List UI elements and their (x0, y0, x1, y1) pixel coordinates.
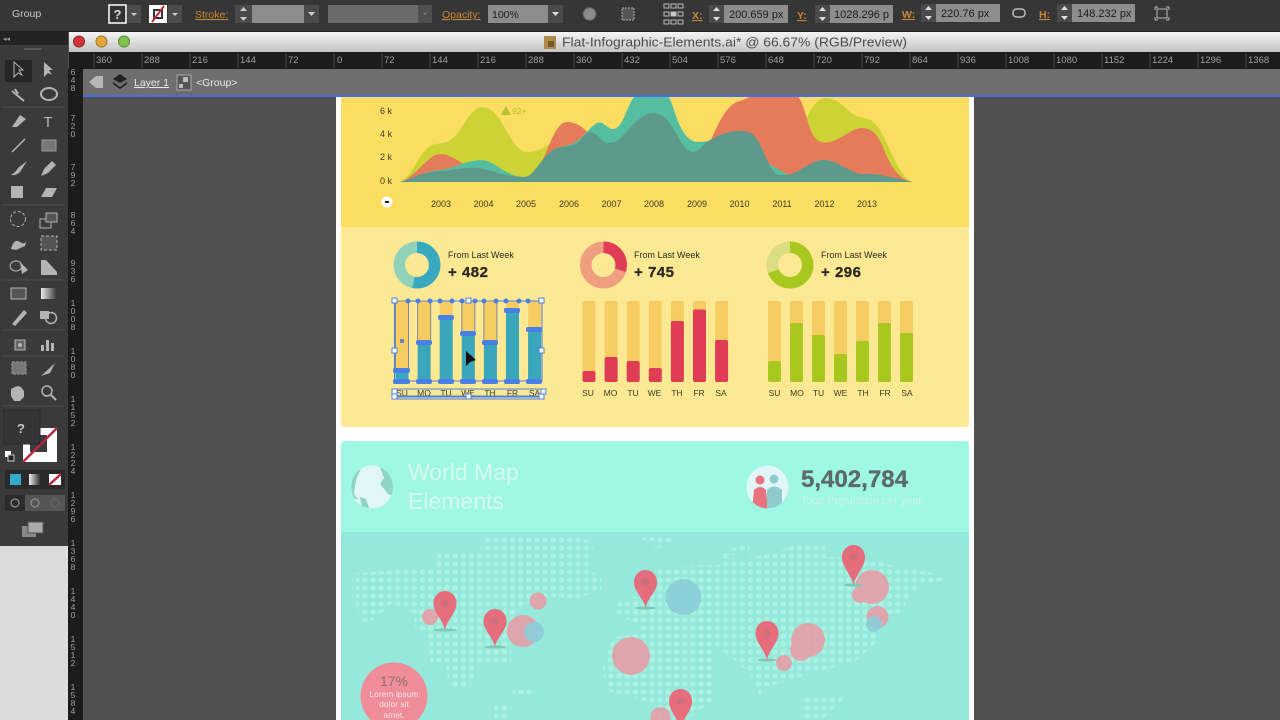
icon: cursor arrow (466, 351, 476, 366)
x-axis years: 2005 (516, 199, 536, 209)
vertical ruler: 7 (71, 162, 75, 172)
callout: 17%: Lorem ipsum (369, 689, 419, 699)
icon: group (177, 75, 191, 90)
horizontal ruler: 360 (96, 55, 112, 66)
bar chart 1: FR (507, 388, 518, 398)
data bubbles (422, 570, 889, 720)
horizontal ruler: 720 (816, 55, 832, 66)
layer breadcrumb bar (83, 69, 1280, 97)
bar chart 2: WE (648, 388, 662, 398)
vertical ruler: 6 (71, 514, 76, 524)
bar chart 1: MO (417, 388, 431, 398)
vertical ruler: 0 (71, 306, 76, 316)
vertical ruler: 7 (71, 113, 75, 123)
bar chart 3: TH (857, 388, 869, 398)
vertical ruler: 1 (71, 442, 75, 452)
x-axis years: 2013 (857, 199, 877, 209)
bar chart 3 (768, 301, 913, 398)
callout: 17%: dolor sit (379, 699, 410, 709)
horizontal ruler: 792 (864, 55, 880, 66)
stat 2: + 745 (634, 264, 674, 281)
transform fields: 1028.296 p (834, 9, 889, 21)
y-axis labels: 2 k (380, 152, 393, 162)
opacity control (442, 5, 563, 23)
vertical ruler: 2 (71, 498, 76, 508)
vertical ruler: 1 (71, 394, 75, 404)
vertical ruler: 0 (71, 354, 76, 364)
vertical ruler: 8 (71, 322, 76, 332)
vertical ruler: 1 (71, 586, 75, 596)
population stat (801, 466, 922, 507)
vertical ruler: 1 (71, 402, 76, 412)
callout: 17%: amet. (383, 710, 405, 720)
bar chart 3: WE (834, 388, 848, 398)
y-axis labels (380, 106, 393, 186)
horizontal ruler: 0 (337, 55, 342, 66)
callout: 17%: 17% (380, 673, 408, 689)
vertical ruler: 2 (71, 418, 76, 428)
panel dividers (2, 107, 64, 406)
bar chart 2 (582, 301, 728, 398)
icon: align (622, 8, 634, 20)
transform fields: 220.76 px (941, 8, 990, 20)
bar chart 2: SA (715, 388, 727, 398)
vertical ruler: 6 (71, 274, 76, 284)
vertical ruler: 4 (71, 594, 76, 604)
panel: world map header (341, 441, 969, 532)
tools panel: ◂◂ (3, 36, 11, 43)
x-axis years: 2010 (729, 199, 750, 209)
x-axis years: 2004 (473, 199, 494, 209)
vertical ruler: 9 (71, 258, 75, 268)
vertical ruler: 1 (71, 682, 75, 692)
vertical ruler: 8 (71, 698, 76, 708)
icon: recolor (583, 8, 596, 20)
x-axis years (431, 199, 877, 209)
artboard (336, 88, 974, 720)
stat 1 (448, 250, 514, 281)
icon: globe (351, 466, 394, 508)
donut 1 (399, 247, 435, 283)
vertical ruler: 0 (71, 610, 76, 620)
transform fields: 148.232 px (1077, 8, 1132, 20)
heading: World Map (408, 459, 519, 485)
vertical ruler: 0 (71, 129, 76, 139)
horizontal ruler: 864 (912, 55, 928, 66)
layer name: Layer 1 (134, 77, 169, 89)
vertical ruler: 4 (71, 706, 76, 716)
icon: people (746, 466, 788, 510)
heading: Elements (408, 488, 504, 514)
legend dot (382, 196, 392, 208)
control bar (0, 0, 1280, 32)
stat 1: + 482 (448, 264, 488, 281)
icon: back arrow (89, 76, 103, 88)
horizontal ruler: 1152 (1104, 55, 1124, 66)
callout: 17% (360, 662, 428, 720)
transform fields (692, 4, 1135, 23)
panel: weekly stats (341, 227, 969, 427)
horizontal ruler: 72 (384, 55, 395, 66)
bar chart 3: FR (879, 388, 891, 398)
vertical ruler: 4 (71, 466, 76, 476)
tool icons: T (43, 114, 53, 131)
bar chart 1 (396, 301, 541, 398)
vertical ruler: 5 (71, 690, 76, 700)
bar chart 2: TU (627, 388, 639, 398)
x-axis years: 2007 (601, 199, 622, 209)
vertical ruler: 8 (71, 362, 76, 372)
icon: document (544, 36, 556, 49)
horizontal ruler: 504 (672, 55, 688, 66)
opacity control: 100% (492, 9, 519, 21)
transform fields: W: (902, 9, 915, 21)
bar chart 1: TU (440, 388, 452, 398)
dotted world map (341, 532, 969, 720)
vertical ruler: 0 (71, 314, 76, 324)
bar chart 3: MO (790, 388, 804, 398)
bar chart 3: SU (769, 388, 780, 398)
vertical ruler: 1 (71, 538, 75, 548)
x-axis years: 2003 (431, 199, 451, 209)
transform fields: Y: (797, 10, 807, 22)
selected tool (5, 60, 32, 82)
vertical ruler: 1 (71, 490, 75, 500)
vertical ruler: 2 (71, 658, 76, 668)
icon: layers (113, 74, 127, 89)
bar chart 2: FR (693, 388, 705, 398)
selection label: Group (12, 8, 41, 20)
x-axis years: 2009 (687, 199, 707, 209)
horizontal ruler: 1008 (1008, 55, 1029, 66)
vertical ruler (68, 67, 83, 720)
vertical ruler: 4 (71, 602, 76, 612)
vertical ruler: 8 (71, 83, 76, 93)
icon: link (1013, 9, 1025, 17)
bar chart 1: TH (484, 388, 496, 398)
y-axis labels: 6 k (380, 106, 393, 116)
stat 2: From Last Week (634, 250, 700, 260)
vertical ruler: 1 (71, 650, 76, 660)
x-axis years: 2008 (644, 199, 664, 209)
vertical ruler: 1 (71, 346, 75, 356)
fill swatch: ? (114, 7, 122, 22)
horizontal ruler: 144 (240, 55, 256, 66)
stat 1: From Last Week (448, 250, 514, 260)
bar chart 2: SU (582, 388, 594, 398)
vertical ruler: 6 (71, 218, 76, 228)
horizontal ruler: 936 (960, 55, 976, 66)
y-axis labels: 4 k (380, 129, 393, 139)
x-axis years: 2006 (559, 199, 579, 209)
stroke control (195, 5, 319, 23)
opacity control: Opacity: (442, 9, 481, 21)
stroke swatch (149, 5, 182, 23)
horizontal ruler: 360 (576, 55, 592, 66)
drawing mode buttons (5, 495, 65, 511)
panel: area chart (341, 88, 969, 227)
horizontal ruler (69, 52, 1280, 69)
horizontal ruler: 216 (192, 55, 208, 66)
heading (408, 459, 519, 514)
population stat: Total Population per year (801, 495, 922, 507)
horizontal ruler: 1368 (1248, 55, 1269, 66)
vertical ruler: 1 (71, 634, 75, 644)
y-axis labels: 0 k (380, 176, 393, 186)
vertical ruler: 9 (71, 170, 76, 180)
transform fields: X: (692, 10, 702, 22)
horizontal ruler: 1224 (1152, 55, 1173, 66)
tools panel (0, 32, 68, 720)
area chart (400, 88, 912, 182)
horizontal ruler: 648 (768, 55, 784, 66)
stat 3: + 296 (821, 264, 861, 281)
icon: transform (1155, 7, 1169, 20)
donut 2 (586, 247, 621, 283)
vertical ruler: 8 (71, 562, 76, 572)
vertical ruler: 4 (71, 226, 76, 236)
screen mode button (22, 522, 43, 537)
stat 3 (821, 250, 887, 281)
stat 3: From Last Week (821, 250, 887, 260)
bar chart 1: SU (396, 388, 408, 398)
bar chart 3: TU (813, 388, 824, 398)
map pins (433, 545, 865, 720)
vertical ruler: 6 (71, 67, 75, 77)
peak marker (501, 106, 526, 116)
horizontal ruler: 1296 (1200, 55, 1221, 66)
vertical ruler: 9 (71, 506, 76, 516)
horizontal ruler: 288 (528, 55, 544, 66)
selection overlay (392, 298, 546, 399)
color mode buttons (5, 470, 65, 489)
vertical ruler: 2 (71, 121, 76, 131)
vertical ruler: 3 (71, 546, 76, 556)
stat 2 (634, 250, 700, 281)
transform fields: H: (1039, 9, 1050, 21)
peak marker: 92+ (512, 106, 526, 116)
vertical ruler: 8 (71, 210, 75, 220)
document title bar (69, 32, 1280, 52)
fill swatch (109, 5, 141, 23)
vertical ruler: 2 (71, 178, 76, 188)
horizontal ruler: 216 (480, 55, 496, 66)
vertical ruler: 0 (71, 370, 76, 380)
bar chart 2: MO (604, 388, 618, 398)
group name: <Group> (196, 77, 237, 89)
bar chart 1: SA (529, 388, 540, 398)
horizontal ruler: 1080 (1056, 55, 1077, 66)
fill and stroke indicator (4, 410, 57, 462)
bar chart 2: TH (671, 388, 683, 398)
vertical ruler: 5 (71, 410, 76, 420)
document title: Flat-Infographic-Elements.ai* @ 66.67% (RGB/Preview) (562, 34, 907, 50)
disabled profile field (328, 5, 432, 23)
x-axis years: 2012 (814, 199, 835, 209)
horizontal ruler: 144 (432, 55, 448, 66)
horizontal ruler: 72 (288, 55, 299, 66)
x-axis years: 2011 (772, 199, 792, 209)
vertical ruler: 3 (71, 266, 76, 276)
horizontal ruler: 576 (720, 55, 736, 66)
icon: reference point (664, 4, 683, 24)
vertical ruler: 6 (71, 554, 76, 564)
vertical ruler: 4 (71, 75, 76, 85)
fill and stroke indicator: ? (17, 421, 25, 436)
vertical ruler: 2 (71, 458, 76, 468)
bar chart 1: WE (461, 388, 475, 398)
stroke control: Stroke: (195, 9, 228, 21)
donut 3 (772, 247, 808, 283)
window buttons (74, 36, 130, 47)
vertical ruler: 5 (71, 642, 76, 652)
tool icons (10, 62, 57, 401)
bar chart 3: SA (901, 388, 913, 398)
transform fields: 200.659 px (729, 9, 784, 21)
population stat: 5,402,784 (801, 466, 909, 493)
horizontal ruler: 288 (144, 55, 160, 66)
horizontal ruler: 432 (624, 55, 640, 66)
vertical ruler: 2 (71, 450, 76, 460)
vertical ruler: 1 (71, 298, 75, 308)
panel: world map (341, 532, 969, 720)
